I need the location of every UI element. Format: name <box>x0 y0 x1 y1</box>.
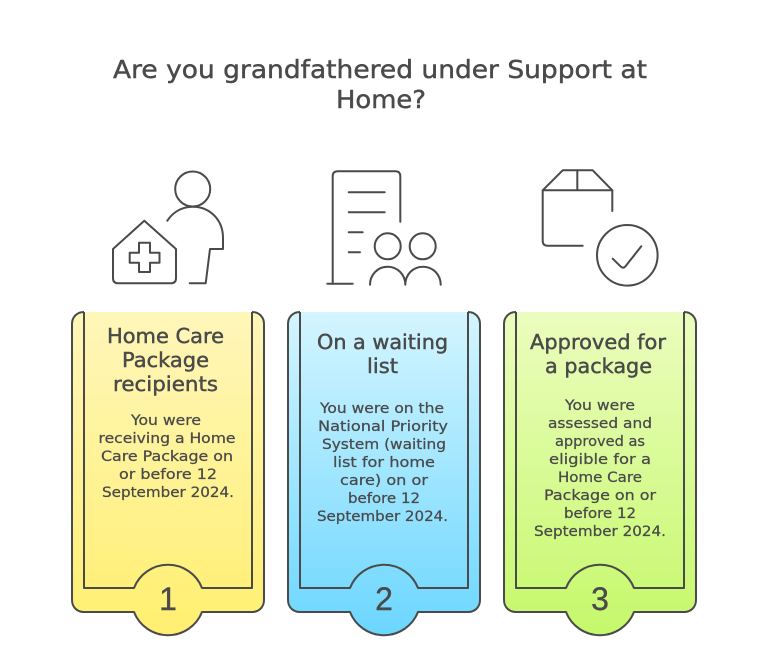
number 3: 3 <box>591 581 609 617</box>
body text 1: or before 12 <box>119 467 217 483</box>
icon: approved package <box>543 170 658 286</box>
body text 2: System (waiting <box>322 437 446 453</box>
heading 3 <box>530 330 667 378</box>
heading 2: On a waiting <box>317 330 448 354</box>
body text 3: September 2024. <box>534 524 666 540</box>
body text 3: Package on or <box>544 488 656 504</box>
body text 2: list for home <box>333 455 435 471</box>
panel: On a waiting list <box>288 312 480 635</box>
number 2: 2 <box>375 581 393 617</box>
heading 1: Package <box>122 348 209 372</box>
title: Are you grandfathered under Support at <box>113 55 647 84</box>
panel: Approved for a package <box>504 312 696 635</box>
heading 2: list <box>367 354 398 378</box>
heading 3: a package <box>545 354 652 378</box>
body text 3: assessed and <box>548 416 652 432</box>
heading 1: recipients <box>113 372 218 396</box>
body text 2: September 2024. <box>317 509 448 525</box>
body text 2: You were on the <box>319 401 444 417</box>
body text 3: Home Care <box>558 470 642 486</box>
body text 3: You were <box>564 398 635 414</box>
body text 2: National Priority <box>318 419 448 435</box>
card shape 3 <box>504 312 696 635</box>
heading 1: Home Care <box>107 324 224 348</box>
body text 3: eligible for a <box>549 452 651 468</box>
icon: document with waiting people <box>327 171 441 285</box>
icon: person with medical home <box>113 172 223 283</box>
body text 1 <box>98 413 236 501</box>
number 1: 1 <box>159 581 177 617</box>
body text 1: You were <box>130 413 201 429</box>
heading 2 <box>317 330 448 378</box>
body text 2 <box>317 401 448 525</box>
card shape 1 <box>72 312 264 635</box>
panel: Home Care Package recipients <box>72 312 264 635</box>
body text 2: care) on or <box>340 473 428 489</box>
body text 1: receiving a Home <box>98 431 236 447</box>
body text 1: September 2024. <box>102 485 234 501</box>
body text 2: before 12 <box>348 491 420 507</box>
title: Home? <box>336 85 426 114</box>
card shape 2 <box>288 312 480 635</box>
body text 3 <box>534 398 666 540</box>
body text 1: Care Package on <box>101 449 233 465</box>
body text 3: approved as <box>555 434 645 450</box>
heading 3: Approved for <box>530 330 667 354</box>
body text 3: before 12 <box>564 506 636 522</box>
heading 1 <box>107 324 224 396</box>
title <box>113 55 647 114</box>
